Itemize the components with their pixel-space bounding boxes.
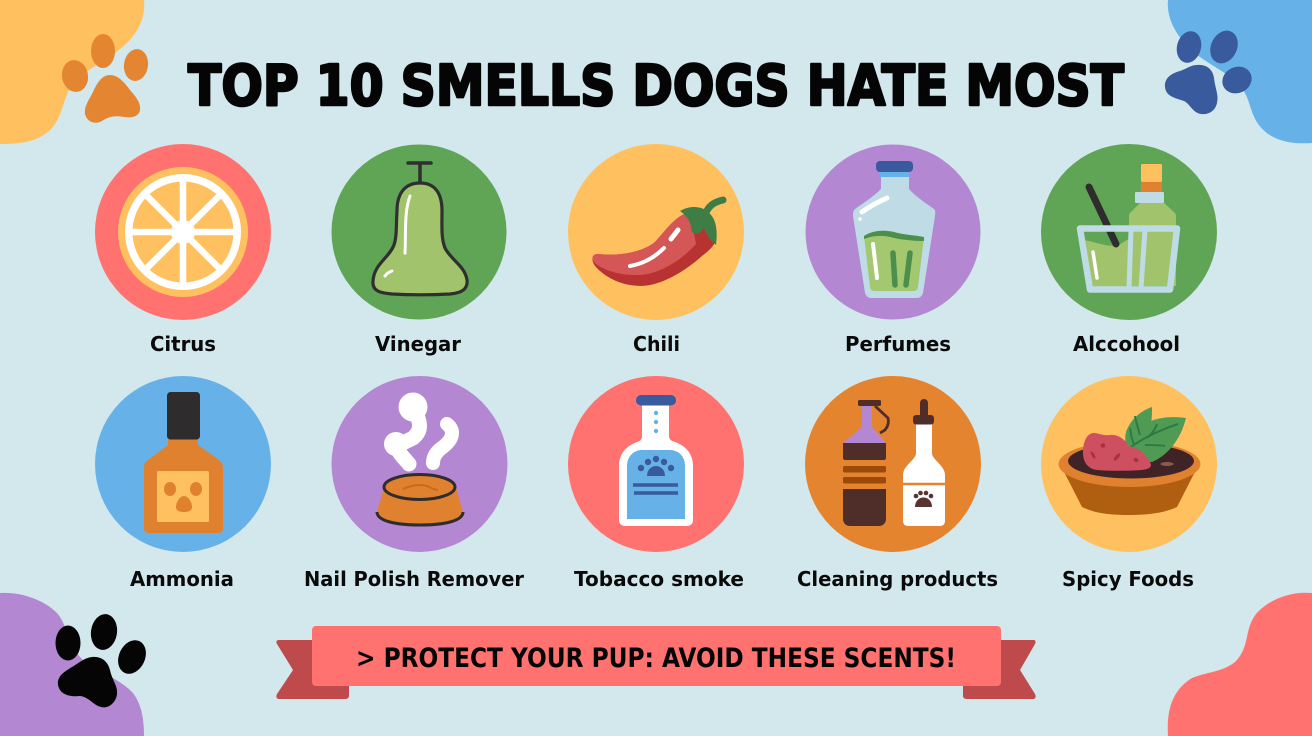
label: cleaning products: Cleaning products bbox=[797, 567, 998, 591]
item: alcohol bbox=[1041, 144, 1217, 356]
icon: black paw bbox=[56, 612, 151, 707]
corner blob: red bbox=[1168, 593, 1312, 736]
corner blob with blue paw bbox=[1165, 0, 1312, 143]
label: chili: Chili bbox=[633, 332, 680, 356]
icon: cleaning bottles bbox=[843, 399, 945, 526]
banner ribbon tails bbox=[276, 640, 1036, 699]
item: chili bbox=[568, 144, 744, 356]
icon: blue paw bbox=[1165, 26, 1256, 114]
item: vinegar bbox=[332, 144, 506, 356]
icon: bowl of spicy food bbox=[1058, 407, 1200, 515]
icon: chili pepper bbox=[592, 200, 723, 286]
icon: bottle and glass bbox=[1080, 164, 1177, 290]
item: tobacco smoke bbox=[568, 376, 744, 591]
label: spicy foods: Spicy Foods bbox=[1062, 567, 1194, 591]
corner blob with orange paw bbox=[0, 0, 150, 144]
label: perfumes: Perfumes bbox=[845, 332, 951, 356]
icon: ammonia bottle bbox=[144, 392, 223, 533]
icon: citrus slice bbox=[118, 167, 248, 297]
label: citrus: Citrus bbox=[150, 332, 216, 356]
banner text: > PROTECT YOUR PUP: AVOID THESE SCENTS! bbox=[356, 643, 956, 674]
label: vinegar: Vinegar bbox=[375, 332, 461, 356]
item: citrus bbox=[95, 144, 271, 356]
banner body bbox=[312, 626, 1001, 686]
label: alcohol: Alccohool bbox=[1073, 332, 1180, 356]
icon: vinegar bottle bbox=[373, 163, 467, 295]
item: perfumes bbox=[806, 144, 980, 356]
item: ammonia bbox=[95, 376, 271, 591]
title: TOP 10 SMELLS DOGS HATE MOST bbox=[188, 54, 1124, 119]
icon: perfume bottle bbox=[853, 161, 935, 298]
label: ammonia: Ammonia bbox=[130, 567, 234, 591]
item: spicy foods bbox=[1041, 376, 1217, 591]
label: tobacco smoke: Tobacco smoke bbox=[574, 567, 744, 591]
icon: orange paw bbox=[59, 34, 150, 123]
banner bbox=[276, 626, 1036, 699]
item: cleaning products bbox=[797, 376, 998, 591]
icon: steaming bowl bbox=[377, 392, 463, 526]
corner blob with black paw bbox=[0, 593, 151, 736]
label: nail polish remover: Nail Polish Remover bbox=[304, 567, 524, 591]
icon: paw label bottle bbox=[619, 395, 693, 526]
item: nail polish remover bbox=[304, 376, 524, 591]
